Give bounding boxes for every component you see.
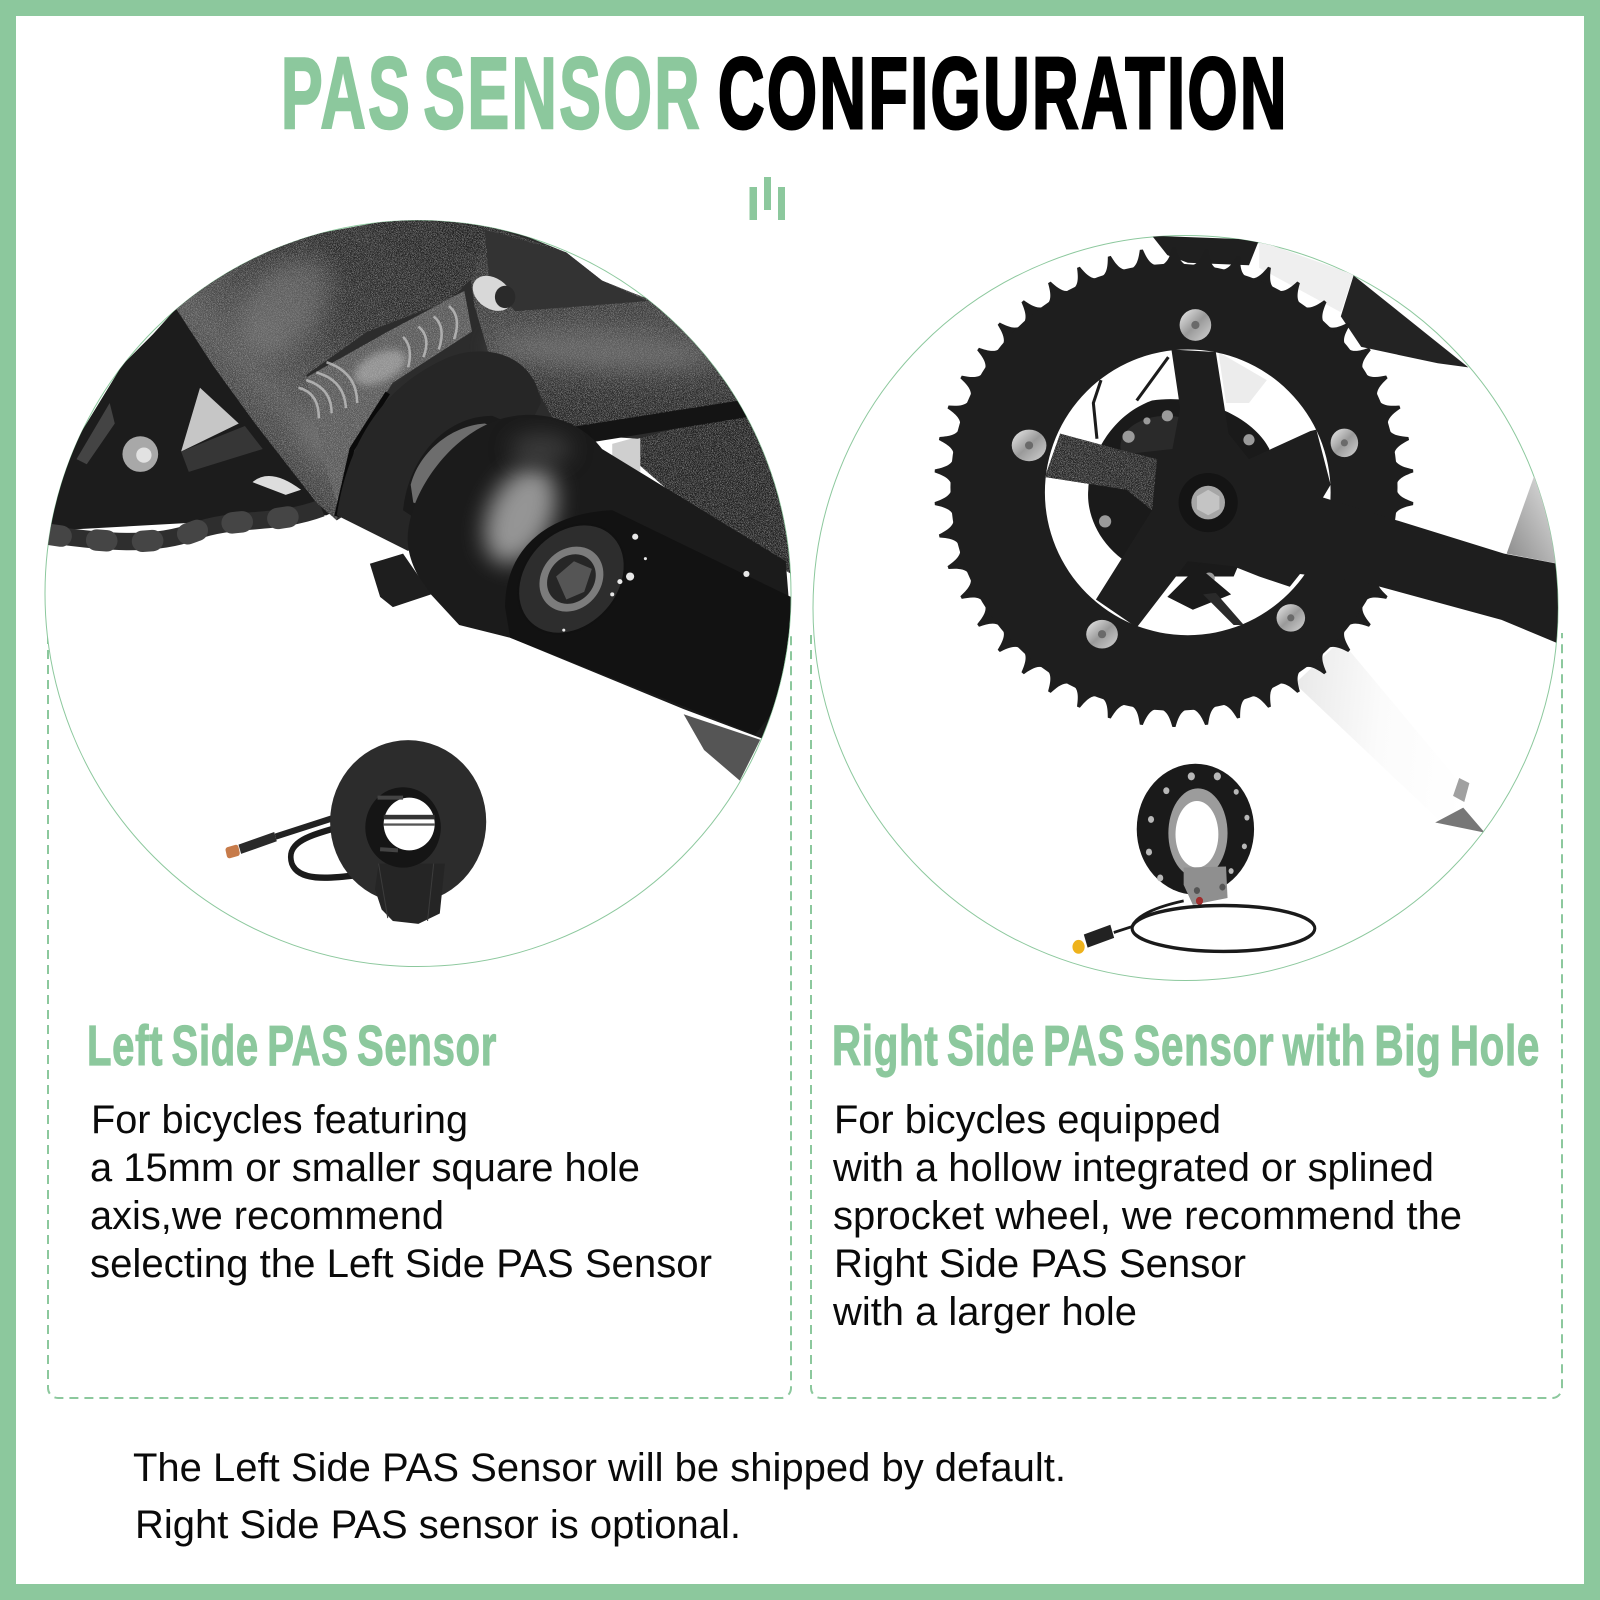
title: PAS SENSOR: [281, 38, 702, 150]
text block: shipping note: The Left Side PAS Sensor will be shipped by default.: [133, 1446, 1066, 1490]
text block: left description: a 15mm or smaller square hole: [90, 1146, 640, 1190]
title: CONFIGURATION: [718, 38, 1289, 150]
text block: right description: with a hollow integrated or splined: [832, 1146, 1434, 1190]
text block: right description: sprocket wheel, we recommend the: [833, 1194, 1462, 1238]
right circle outline: [813, 236, 1558, 980]
title: [281, 38, 1289, 150]
left circle outline: [45, 220, 791, 966]
right photo: chainring and crank: [875, 236, 1559, 881]
panel: right dashed box: [811, 633, 1562, 1398]
heading: left side sensor: Left Side PAS Sensor: [87, 1014, 497, 1078]
text block: right description: [832, 1098, 1462, 1334]
text block: shipping note: Right Side PAS sensor is optional.: [135, 1503, 741, 1547]
base fill behind frame tubes: [176, 214, 750, 520]
left sensor product: black disc with cable: [225, 740, 486, 924]
text block: left description: axis,we recommend: [90, 1194, 444, 1238]
icon: three green bars: [750, 177, 785, 220]
left photo: crank arm on bottom bracket: [46, 214, 796, 781]
text block: right description: Right Side PAS Sensor: [834, 1242, 1246, 1286]
text block: right description: For bicycles equipped: [834, 1098, 1221, 1142]
text block: right description: with a larger hole: [832, 1290, 1137, 1334]
text block: left description: For bicycles featuring: [91, 1098, 468, 1142]
text block: shipping note: [133, 1446, 1066, 1547]
panel: left dashed box: [48, 635, 791, 1398]
text block: left description: selecting the Left Side PAS Sensor: [90, 1242, 712, 1286]
text block: left description: [90, 1098, 712, 1286]
right sensor product: holed disc with yellow connector cable: [1072, 764, 1315, 954]
